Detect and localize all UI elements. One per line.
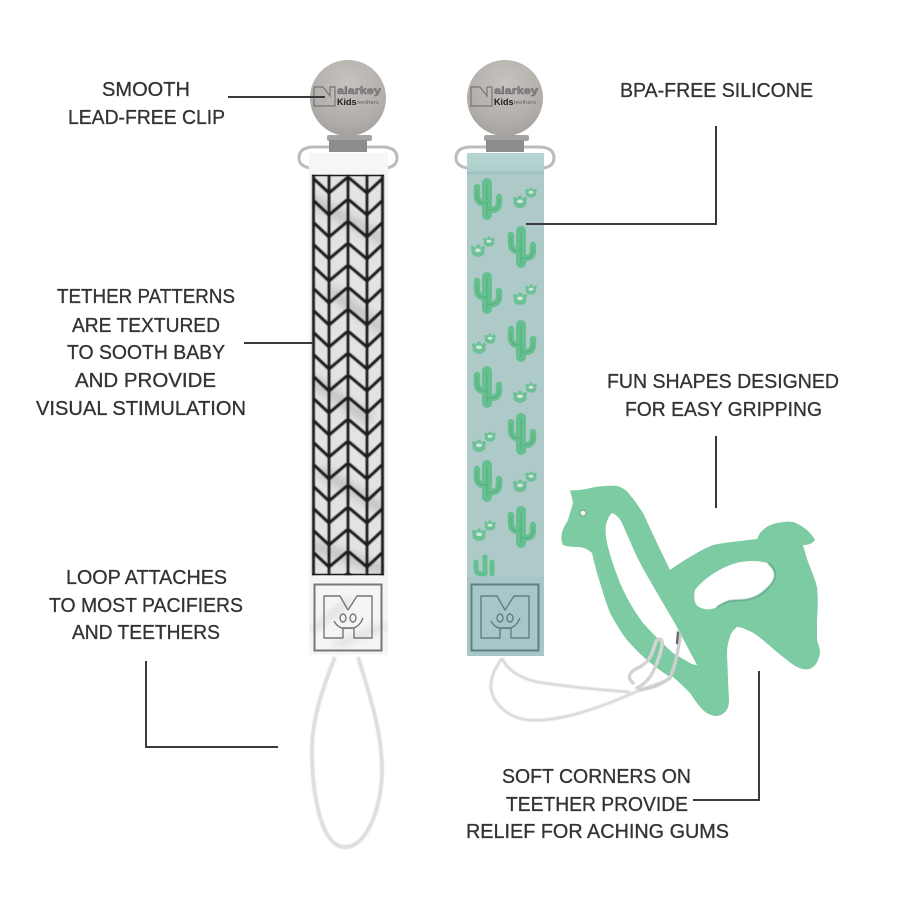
- llama body: [561, 486, 820, 716]
- logo tab: marble: [309, 576, 388, 655]
- callout: smooth lead-free clip: SMOOTH: [102, 79, 190, 101]
- llama teether: [561, 486, 820, 716]
- clip ball: cactus: alarkey: [494, 86, 539, 97]
- callout: soft corners: RELIEF FOR ACHING GUMS: [466, 821, 729, 843]
- leader line: loop: [146, 661, 278, 747]
- leader line: silicone: [526, 126, 716, 224]
- clip ball: marble: [310, 60, 386, 136]
- callout: soft corners: SOFT CORNERS ON: [502, 766, 691, 788]
- callout: smooth lead-free clip: LEAD-FREE CLIP: [68, 107, 225, 129]
- inner hole shadow: [717, 563, 775, 607]
- partial cactus at strap bottom: [476, 557, 492, 574]
- strap top band: cactus: [467, 153, 544, 174]
- logo tab: cactus: [467, 577, 544, 656]
- callout: smooth lead-free clip: [68, 79, 225, 129]
- clip ball: marble: alarkey: [337, 86, 382, 97]
- clip ball: cactus: [467, 60, 543, 136]
- chevron tether pattern: [312, 175, 384, 575]
- callout: fun shapes: FUN SHAPES DESIGNED: [607, 371, 839, 393]
- callout: tether patterns: [36, 286, 246, 420]
- panel: marble pacifier clip: [299, 60, 397, 847]
- clip ball: marble: Kids: [337, 97, 357, 107]
- callout: tether patterns: TO SOOTH BABY: [67, 342, 225, 364]
- clip ball: marble: teethers: [357, 100, 380, 106]
- marble texture behind pattern: [312, 175, 384, 575]
- clip ball: cactus: Kids: [494, 97, 514, 107]
- callout: loop attaches: AND TEETHERS: [72, 622, 220, 644]
- strip top and bottom edge: [312, 176, 384, 574]
- teether rings: [629, 632, 680, 690]
- leader line: soft corners: [693, 671, 759, 800]
- cactus icons: [477, 183, 533, 543]
- clip wire: marble: [299, 147, 397, 168]
- strap top band: marble: [309, 153, 388, 174]
- callout: tether patterns: VISUAL STIMULATION: [36, 398, 246, 420]
- callout: loop attaches: TO MOST PACIFIERS: [49, 595, 243, 617]
- clip wire: cactus: [456, 147, 554, 168]
- callout: loop attaches: LOOP ATTACHES: [66, 567, 227, 589]
- strap body: cactus: [467, 173, 544, 577]
- leader line: fun shapes: [715, 436, 717, 508]
- callout: tether patterns: AND PROVIDE: [75, 370, 216, 392]
- callout: soft corners: TEETHER PROVIDE: [506, 794, 688, 816]
- callout: tether patterns: ARE TEXTURED: [72, 315, 220, 337]
- loop cord: cactus: [491, 658, 663, 720]
- leader line: clip: [228, 96, 325, 98]
- callout: loop attaches: [49, 567, 243, 644]
- clip ball: cactus: teethers: [514, 100, 537, 106]
- callout: tether patterns: TETHER PATTERNS: [57, 286, 235, 308]
- paw icons: [471, 187, 537, 541]
- loop cord: marble: [312, 657, 382, 847]
- callout: fun shapes: [607, 371, 839, 421]
- callout: soft corners: [466, 766, 729, 843]
- panel: cactus pacifier clip: [456, 60, 663, 720]
- llama eye: [580, 510, 586, 516]
- callout: fun shapes: FOR EASY GRIPPING: [625, 399, 822, 421]
- clip hinge: cactus: [484, 135, 529, 152]
- callout: BPA-free silicone: BPA-FREE SILICONE: [620, 80, 813, 102]
- clip hinge: marble: [327, 135, 372, 152]
- leader line: tether: [244, 342, 313, 344]
- strap edge: marble: [309, 174, 388, 576]
